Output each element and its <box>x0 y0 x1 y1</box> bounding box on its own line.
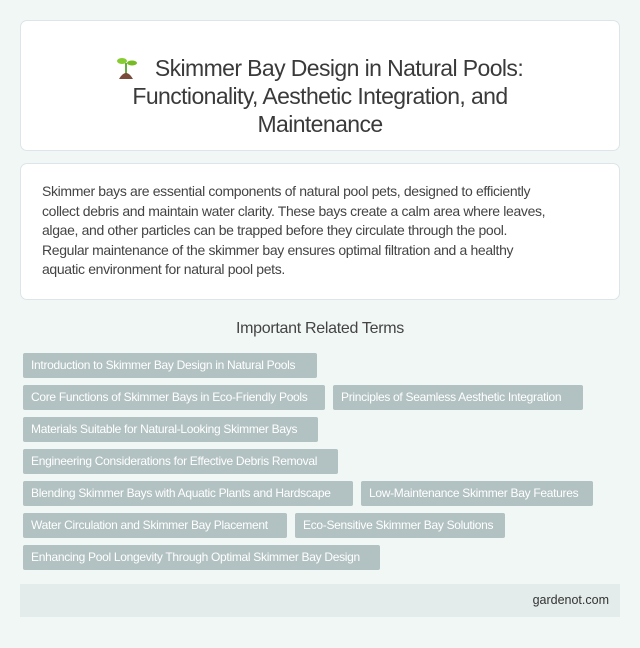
tag: Materials Suitable for Natural-Looking Skimmer Bays <box>31 422 297 436</box>
footer <box>20 584 620 617</box>
description text: Regular maintenance of the skimmer bay ensures optimal filtration and a healthy <box>42 242 513 258</box>
tag: Eco-Sensitive Skimmer Bay Solutions <box>303 518 493 532</box>
tag <box>23 385 325 410</box>
description text: Skimmer bays are essential components of natural pool pets, designed to efficiently <box>42 183 530 199</box>
tag: Water Circulation and Skimmer Bay Placement <box>31 518 268 532</box>
tag <box>23 417 318 442</box>
tag <box>23 513 287 538</box>
tag <box>23 353 317 378</box>
tag: Principles of Seamless Aesthetic Integration <box>341 390 561 404</box>
title: Functionality, Aesthetic Integration, and <box>132 83 508 109</box>
description text: collect debris and maintain water clarity. These bays create a calm area where leaves, <box>42 203 545 219</box>
tag <box>333 385 583 410</box>
tag: Engineering Considerations for Effective Debris Removal <box>31 454 317 468</box>
heading: related terms: Important Related Terms <box>236 320 404 337</box>
title: Skimmer Bay Design in Natural Pools: <box>155 55 523 81</box>
tag <box>23 545 380 570</box>
tag: Low-Maintenance Skimmer Bay Features <box>369 486 578 500</box>
tag <box>23 449 338 474</box>
icon: seedling <box>117 58 137 79</box>
description text: algae, and other particles can be trapped before they circulate through the pool. <box>42 222 507 238</box>
tag: Introduction to Skimmer Bay Design in Natural Pools <box>31 358 295 372</box>
tag: Enhancing Pool Longevity Through Optimal Skimmer Bay Design <box>31 550 360 564</box>
tag <box>295 513 505 538</box>
title <box>20 20 620 151</box>
description text: aquatic environment for natural pool pets. <box>42 261 285 277</box>
title: Maintenance <box>257 111 383 137</box>
tag <box>361 481 593 506</box>
tag: Core Functions of Skimmer Bays in Eco-Friendly Pools <box>31 390 308 404</box>
tag: Blending Skimmer Bays with Aquatic Plants and Hardscape <box>31 486 331 500</box>
tag <box>23 481 353 506</box>
tags <box>23 353 593 570</box>
footer: gardenot.com <box>533 593 609 607</box>
description text <box>20 163 620 300</box>
